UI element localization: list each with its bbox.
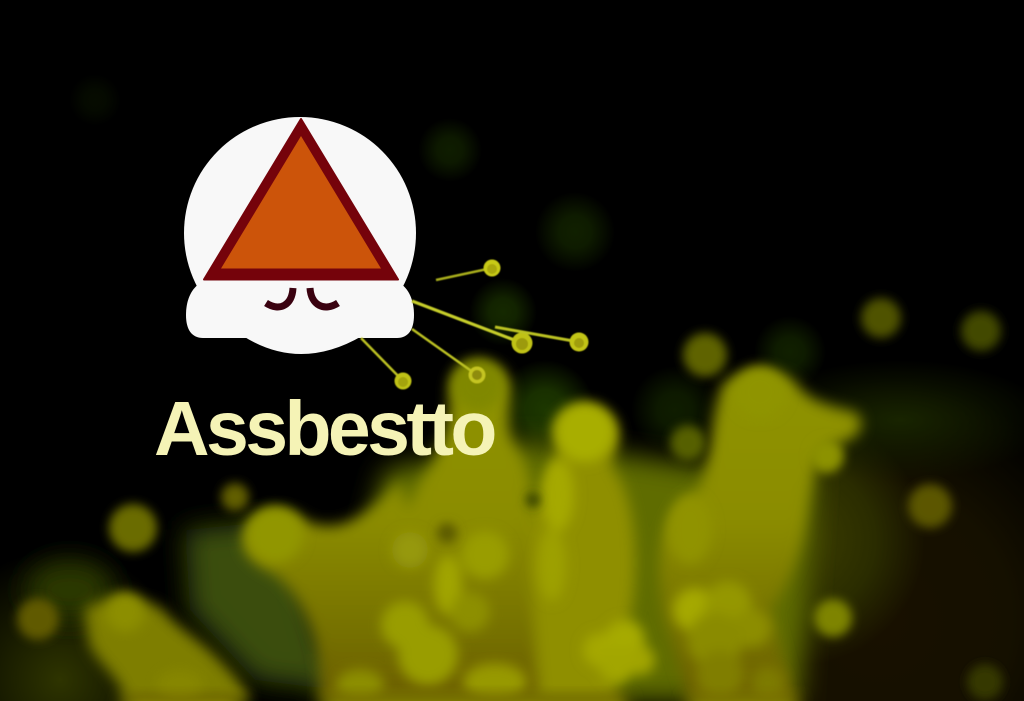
right column	[659, 371, 862, 701]
icon: white head and cloud base	[184, 117, 416, 354]
icon: hazard symbol	[184, 117, 416, 354]
blurred yellow-green asbestos cloud	[84, 362, 862, 701]
left-centre column	[385, 362, 540, 701]
olive cloud mass	[26, 440, 815, 701]
fibre 1	[436, 260, 500, 280]
fibres with round tips	[361, 260, 588, 390]
background haze	[0, 360, 1024, 701]
fibre 5	[361, 338, 412, 390]
icon: warning triangle fill	[221, 136, 381, 268]
centre column	[528, 408, 635, 701]
dark spots in cloud	[437, 493, 540, 543]
icon: warning triangle outline	[204, 119, 398, 280]
bright cloud highlights	[105, 359, 786, 701]
fibre 3	[495, 327, 588, 352]
far-left column	[243, 480, 430, 701]
scattered blurred particles	[17, 298, 1003, 700]
distant blurred particles	[69, 74, 826, 460]
cloud bottom edge	[125, 684, 795, 701]
title: Assbestto	[154, 386, 495, 472]
icon: closed eyes	[266, 288, 338, 307]
lower-left column	[84, 599, 250, 701]
fibre 4	[412, 329, 486, 384]
fibre 2	[412, 301, 532, 354]
